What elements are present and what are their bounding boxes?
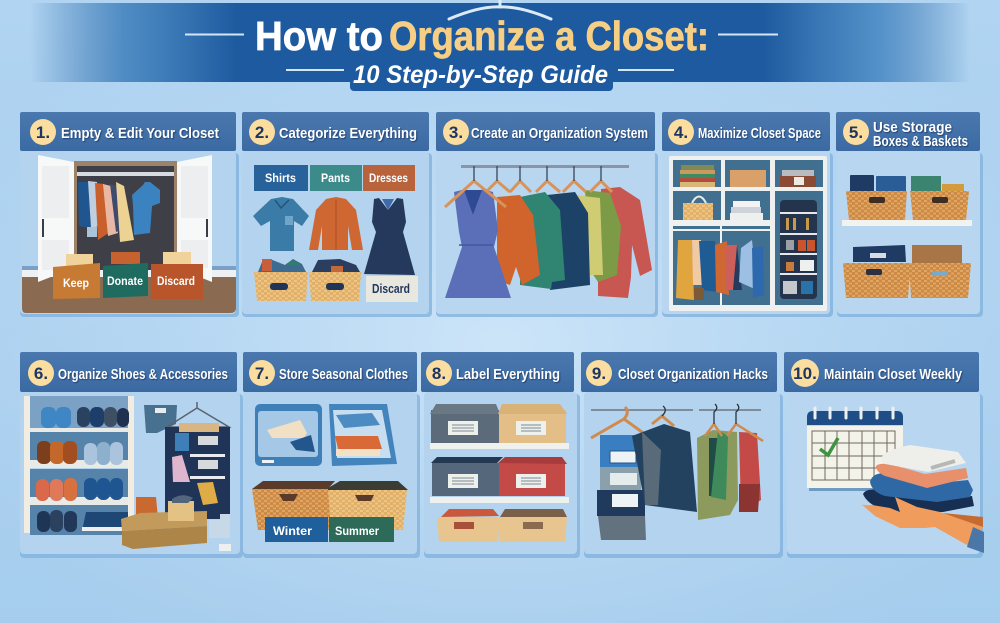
label: pants [310,165,362,191]
heading: step 4 [662,112,830,151]
panel: step 5 [836,112,980,314]
wall box [144,405,177,433]
heading: step 10: 10. [793,364,817,383]
hanger left [591,407,653,440]
hanger hooks [474,166,601,181]
basket: winter [252,481,335,530]
heading: step 6: Organize Shoes & Accessories [58,366,228,383]
panel: step 8 [421,352,577,554]
heading: step 2 [242,112,429,151]
heading: step 2: Categorize Everything [279,125,417,142]
box: donate [103,252,148,298]
label: dresses: Dresses [369,171,408,185]
closet unit [669,156,827,311]
shoes row 3 [36,478,123,501]
panel shadows [20,153,983,558]
storage bag 2 [329,404,397,466]
heading: step 4: Maximize Closet Space [698,125,821,142]
dress [364,198,415,275]
heading: step 6: 6. [34,364,48,383]
shoes row 2 [37,441,123,465]
heading: step 9 [581,352,777,392]
box: keep: Keep [63,276,89,290]
basket 1 [254,259,308,301]
heading: step 7 [243,352,417,392]
heading: step 4: 4. [674,123,688,142]
big cardboard box [121,511,207,549]
heading: step 6 [20,352,237,392]
hanging garments [445,187,652,298]
heading: step 10: Maintain Closet Weekly [824,366,963,383]
hangers [445,181,612,207]
storage box [780,170,816,187]
top items [850,175,964,193]
basket [730,170,766,187]
title: Organize a Closet: [389,13,709,59]
label: shirts [254,165,308,191]
orange bin [134,497,158,523]
heading: step 1: Empty & Edit Your Closet [61,125,219,142]
title: How to [255,13,383,59]
shoes row 1 [41,407,129,428]
label: pants: Pants [321,171,350,185]
hangers right [705,404,763,441]
heading: step 10 [784,352,979,392]
storage bag 1 [255,404,322,466]
basket 2 [309,259,361,301]
heading: step 5 [836,112,980,151]
top baskets [846,191,969,220]
bin: summer [329,517,394,542]
heading: step 8 [421,352,574,392]
bin: summer: Summer [335,524,379,538]
heading: step 9: Closet Organization Hacks [618,366,768,383]
box row 2 [431,457,567,496]
panel: step 6 [20,352,240,554]
small box [168,495,194,521]
lower items [853,245,962,265]
shelf [842,220,972,226]
box: keep [53,254,100,299]
heading: step 8: Label Everything [456,366,560,383]
box: donate: Donate [107,274,143,288]
basket: summer [328,481,408,530]
lower baskets [843,263,971,298]
panel: step 9 [581,352,780,554]
olive jacket and scarf [697,430,738,520]
heading: step 5: 5. [849,123,863,142]
heading: step 5: Use Storage [873,119,952,136]
heading: step 5: Boxes & Baskets [873,133,968,150]
shoes row 4 [37,510,128,532]
wicker basket [683,196,713,220]
box row 1 [430,404,567,443]
clothes on rod [676,240,764,300]
heading: step 3: 3. [449,123,463,142]
hanging clothes [78,181,160,242]
bin: winter [265,517,328,542]
heading: step 7: Store Seasonal Clothes [279,366,408,383]
panel: step 3 [436,112,655,314]
icon: hanger [449,0,551,19]
floor [22,277,236,313]
heading: step 1: 1. [36,123,50,142]
subtitle: 10 Step-by-Step Guide [353,61,608,89]
panel: step 2 [242,112,429,314]
hand [860,497,984,553]
orange shirt [309,197,363,250]
clothes rod [461,165,629,168]
blazer [632,406,697,512]
heading: step 2: 2. [255,123,269,142]
shirt [253,197,309,251]
folded clothes [863,445,974,512]
title banner [30,0,970,91]
panel: step 4 [662,112,830,314]
red vest [739,432,761,512]
label: shirts: Shirts [265,171,296,185]
shelf 1 [430,443,569,449]
hanging organizer [597,435,646,540]
calendar [807,408,903,491]
rods [591,409,761,411]
heading: step 8: 8. [432,364,446,383]
shoe shelves [24,396,134,535]
panel: step 1 [20,112,236,314]
panel: step 10 [784,352,984,554]
title [185,13,778,59]
shelf 2 [430,497,569,503]
heading: step 3 [436,112,655,151]
hanging organizer [780,200,817,299]
icon: check mark [820,438,838,455]
basket row [437,509,567,542]
closet interior [74,161,177,270]
label: dresses [363,165,415,191]
heading: step 9: 9. [592,364,606,383]
box: discard [151,252,203,299]
hanging organizer [165,402,231,551]
panel: step 7 [243,352,417,554]
discard box: Discard [372,281,410,296]
bin: winter: Winter [273,524,312,538]
stacked books [680,165,715,187]
open doors [38,155,212,282]
heading: step 7: 7. [255,364,269,383]
heading: step 1 [20,112,236,151]
folded linens [730,201,763,220]
discard box [366,276,418,302]
box: discard: Discard [157,274,195,288]
heading: step 3: Create an Organization System [471,125,648,142]
